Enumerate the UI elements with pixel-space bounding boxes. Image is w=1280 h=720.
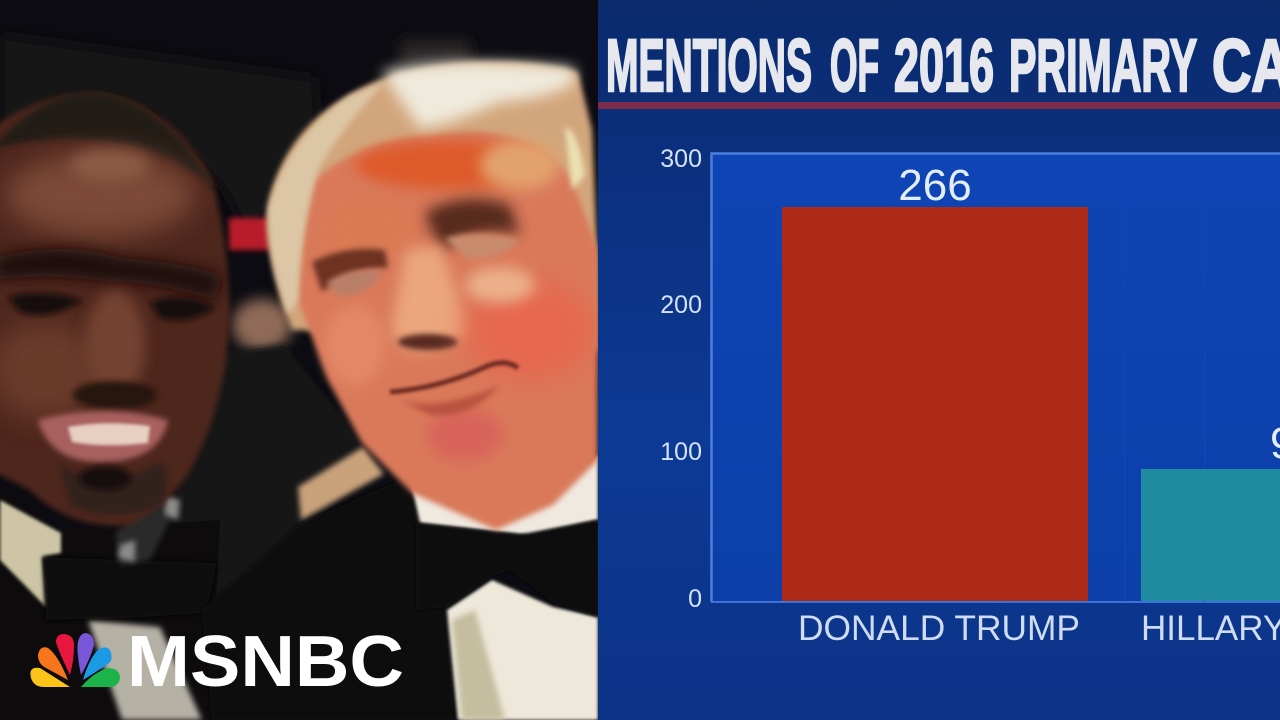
plot frame: [712, 154, 1280, 602]
x label: Donald Trump: DONALD TRUMP: [798, 609, 1080, 648]
y axis labels: 0: [688, 585, 702, 613]
y axis labels: 100: [660, 438, 702, 466]
mouth: [390, 363, 518, 392]
chart title: 2016: [894, 24, 994, 107]
title rule: [598, 102, 1280, 109]
logo: MSNBC: [30, 622, 404, 702]
background blonde hair: [298, 447, 384, 520]
y axis labels: [660, 145, 702, 613]
bar: Hillary Clinton: [1141, 469, 1280, 601]
man on right: tuxedo: [216, 508, 334, 598]
man on right: head: [268, 62, 598, 530]
cheeks: [465, 280, 595, 380]
man on right: blond hair: [267, 62, 598, 350]
nose: [392, 245, 470, 351]
panel: bar chart broadcast screen: [598, 0, 1280, 720]
icon: peacock: [30, 633, 120, 687]
chart title: [606, 24, 1280, 107]
man on right: shirt and bow tie: [412, 455, 598, 720]
chart title: MENTIONS: [606, 24, 812, 107]
chart plot area: [711, 153, 1280, 602]
background person: [232, 299, 292, 351]
y axis labels: 200: [660, 291, 702, 319]
hair highlight: [382, 62, 575, 128]
chart title: OF: [830, 24, 879, 107]
man on left: tuxedo and shirt: [0, 490, 220, 720]
wordmark: MSNBC: [127, 622, 404, 702]
background red sign: [229, 218, 271, 250]
eyes and brows: [425, 199, 520, 250]
bar: Donald Trump: [782, 207, 1088, 601]
man on left: head: [0, 93, 230, 526]
value: 266: 266: [898, 161, 972, 210]
y axis labels: 300: [660, 145, 702, 173]
photo: two men in tuxedos: [0, 0, 598, 720]
